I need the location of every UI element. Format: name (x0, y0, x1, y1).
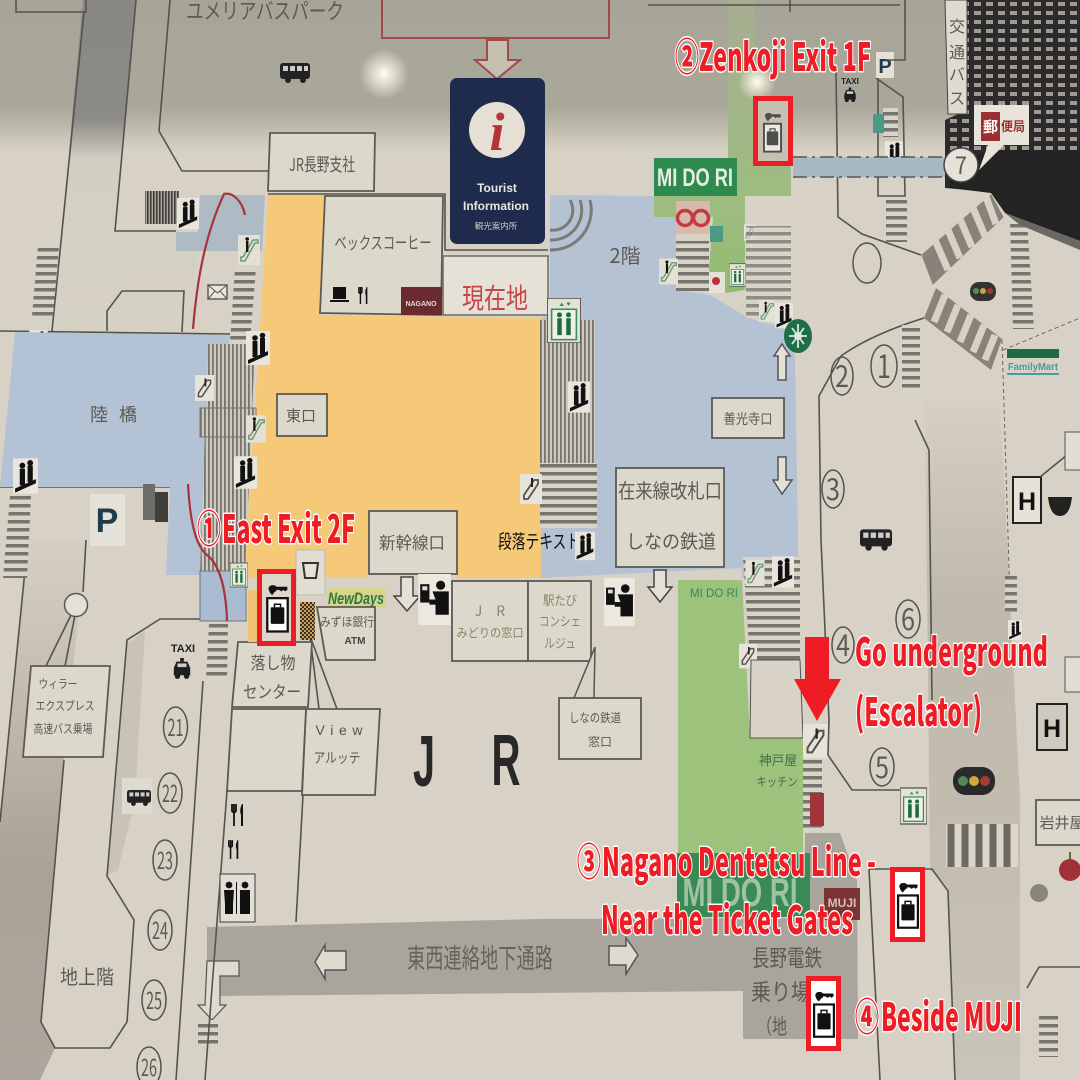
crosswalk stripes two (934, 295, 995, 360)
H sign lower: H (1043, 715, 1061, 743)
sign: local transit bus (945, 0, 967, 114)
arrow to tourist information (475, 40, 520, 79)
icon: escalator (759, 300, 775, 322)
label: East Exit 2F (197, 499, 355, 555)
bus stop 24 (148, 910, 172, 950)
escalator block (676, 241, 709, 291)
Mizuho Bank ATM box (317, 607, 375, 660)
blue walkway (793, 157, 945, 177)
icon: escalator (238, 235, 260, 265)
label: Nagano Dentetsu Line (577, 832, 876, 888)
JR Nagano branch box: JR長野支社 (289, 151, 355, 177)
icon: escalator (739, 644, 757, 668)
number 6 (896, 597, 920, 639)
conventional line gates box: 在来線改札口 (618, 475, 722, 504)
icon: bus (122, 778, 152, 814)
number 1 (871, 342, 897, 388)
number 6: 6 (901, 597, 915, 639)
label: Zenkoji Exit 1F: ② (675, 27, 699, 83)
panel: tourist information sign (450, 78, 545, 244)
icon: cutlery (229, 840, 238, 859)
bump with P sign (876, 78, 905, 196)
route curve lower (188, 484, 227, 621)
panel: tourist information sign: 観光案内所 (475, 220, 518, 232)
you are here box (443, 256, 548, 317)
number 1: 1 (877, 342, 891, 388)
icon: stairs person (885, 141, 903, 167)
bus stop 26 (137, 1047, 161, 1080)
Willer Express box: 高速バス乗場 (34, 720, 92, 737)
stairs small (902, 325, 920, 392)
label: Nagano Dentetsu boarding: 長野電鉄 (752, 939, 822, 973)
conventional line gates box (616, 468, 724, 567)
shop outlines (217, 791, 303, 922)
panel: green MIDORI lower (678, 580, 806, 917)
icon: bus (280, 63, 310, 83)
Mizuho Bank ATM box: ATM (345, 636, 365, 647)
arrow right (609, 938, 638, 974)
logo: Starbucks (784, 319, 812, 353)
logo: NAGANO (405, 301, 437, 308)
icon: traffic light (970, 282, 996, 301)
label: Nagano Dentetsu Line: ③ (577, 832, 601, 888)
arrow down (394, 577, 420, 611)
number 7: 7 (955, 146, 967, 181)
icon: traffic light lower (953, 767, 995, 795)
MIDORI lower sign (677, 853, 810, 917)
MUJI sign: MUJI (828, 896, 856, 910)
corner box top-left (16, 0, 86, 12)
H sign lower (1037, 704, 1067, 750)
bus stop 21: 21 (168, 709, 184, 743)
marker 1: red locker frame East Exit (260, 572, 294, 644)
label: ground floor: 地上階 (60, 961, 114, 990)
blue area upper landing (176, 195, 265, 251)
number 2: 2 (835, 354, 849, 396)
icon: elevator (547, 298, 581, 343)
icon: staff (604, 578, 635, 626)
upper strip between info and shop (268, 194, 548, 250)
road lines lower-left (176, 681, 217, 1080)
icon: stairs person (13, 458, 38, 494)
panel: east exit concourse orange (244, 195, 543, 578)
stairs landing band (200, 408, 256, 437)
Beck's Coffee box (320, 196, 443, 315)
Willer Express box: ウィラー (38, 675, 78, 692)
route curve upper (193, 194, 245, 329)
JR ticket office box: みどりの窓口 (456, 624, 524, 641)
icon: apple badge (709, 272, 725, 293)
Shinkansen box (369, 511, 457, 574)
arrow L-shape to stairs (198, 961, 239, 1020)
left lower shade (0, 540, 86, 1080)
panel: underground passage grey (207, 833, 858, 1039)
floor label 2F: 2階 (609, 240, 641, 269)
stairs upper right (883, 107, 898, 137)
label: Escalator: (Escalator) (855, 682, 982, 738)
circle with pointer: bus stop (46, 594, 88, 666)
stairs center lower (540, 463, 597, 528)
top shaded area (0, 0, 1080, 150)
conventional line gates box: しなの鉄道 (626, 527, 716, 554)
label: Beside MUJI (855, 987, 1022, 1043)
arrow up (774, 344, 790, 380)
marker 3: red locker frame Nagano Dentetsu (892, 870, 922, 940)
label: East Exit 2F: East Exit 2F (222, 499, 355, 555)
sign: MIDORI top: MI DO RI (657, 164, 733, 192)
travel concierge box: コンシェ (539, 611, 581, 630)
JR ticket office box: J R (475, 601, 505, 621)
icon: post box (810, 793, 824, 826)
stairs small upper (886, 200, 907, 242)
label: bridge: 陸 (90, 401, 108, 427)
sign: MIDORI top (654, 158, 737, 196)
arrow down (773, 457, 792, 494)
sign: post office: 郵 (983, 116, 998, 137)
street outlines right (819, 69, 1080, 1080)
bus stop 21 (164, 707, 188, 747)
ATM icon box (296, 550, 325, 595)
sign: local transit bus: 交 (949, 13, 965, 37)
stairs center (540, 320, 595, 463)
stairs to upper (230, 268, 256, 342)
paragraph placeholder text: 段落テキスト (498, 527, 580, 554)
icon: mail (208, 285, 227, 299)
stairs right block (743, 557, 800, 660)
icon: escalator (744, 224, 756, 241)
icon: stairs person (775, 303, 793, 328)
label: Nagano Dentetsu Line: Nagano Dentetsu Line - (602, 832, 876, 888)
label: underground passage: 東西連絡地下通路 (407, 937, 553, 976)
icon: escalator (246, 415, 266, 443)
bus stop 22: 22 (162, 775, 178, 809)
marker 2: red locker frame Zenkoji Exit (756, 98, 790, 164)
icon: hot spring (1030, 884, 1048, 902)
icon: escalator (520, 474, 542, 504)
icon: elevator (230, 563, 248, 587)
label: Iwaiya (1036, 800, 1080, 845)
travel concierge box: 駅たび (543, 590, 577, 609)
arrow down (648, 570, 672, 602)
sign: local transit bus: 通 (949, 39, 965, 63)
lost and found box: センター (243, 678, 301, 703)
East exit label box (277, 394, 327, 436)
label: Kobeya Kitchen (756, 750, 798, 790)
sign: post office: 便局 (1001, 116, 1025, 135)
panel: zenkoji concourse blue (541, 195, 798, 578)
label: Near the Ticket Gates: Near the Ticket Gates (601, 890, 853, 946)
JR big letters: R (492, 721, 520, 801)
light green upper (654, 0, 791, 293)
H sign with ramen (1013, 432, 1080, 523)
glare top (738, 63, 776, 101)
bus stop 25 (142, 980, 166, 1020)
Shinano Railway window callout: 窓口 (588, 733, 612, 750)
number 7 (944, 146, 978, 182)
icon: elevator (729, 264, 746, 286)
sign: post office (974, 105, 1029, 170)
crosswalk stripes one (935, 197, 996, 270)
arrow: go underground (794, 637, 841, 721)
P sign: P (96, 502, 118, 540)
label box long (1065, 657, 1080, 692)
icon: elevator (900, 788, 927, 824)
view alte callout: アルッテ (314, 748, 360, 768)
stairs left (32, 246, 59, 316)
marker 4: red locker frame MUJI (808, 978, 838, 1048)
MIDORI lower sign: MI DO RI (682, 871, 798, 915)
circle marker (853, 243, 881, 283)
Mizuho Bank ATM box: みずほ銀行 (320, 613, 374, 630)
number 3: 3 (826, 467, 840, 509)
Shinano Railway window callout (559, 647, 641, 759)
green sign (710, 226, 723, 242)
P sign (90, 494, 125, 546)
stairs lower-left (3, 496, 31, 578)
road band near terminal (52, 0, 198, 332)
label: Zenkoji Exit 1F: Zenkoji Exit 1F (699, 27, 871, 83)
blue lower west (200, 571, 246, 621)
icon: escalator (745, 560, 765, 586)
icon: stairs person (29, 330, 48, 356)
label: Nagano Dentetsu boarding: 乗り場 (751, 973, 811, 1007)
crosswalk vertical (1010, 220, 1034, 329)
crosswalk diagonal two (924, 288, 1002, 370)
travel concierge box (528, 581, 591, 661)
logo: FamilyMart: FamilyMart (1008, 361, 1058, 373)
label: bridge 2: 橋 (119, 401, 137, 427)
icon: cutlery (232, 804, 243, 826)
red outline top box (382, 0, 609, 38)
view alte callout (302, 636, 380, 795)
view alte callout: View (316, 722, 363, 738)
stairs by kitchen (803, 760, 822, 832)
icon: escalator (803, 724, 828, 758)
taxi (171, 643, 195, 679)
panel: tourist information sign: i (489, 102, 505, 162)
label: East Exit 2F: ① (197, 499, 221, 555)
number 4: 4 (836, 623, 850, 665)
green sign small (873, 114, 884, 133)
icon: stairs person (568, 381, 590, 413)
bus stop 25: 25 (146, 982, 162, 1016)
sign: local transit bus: ス (949, 85, 965, 109)
JR ticket office box (452, 581, 528, 661)
Willer Express box: エクスプレス (36, 697, 94, 714)
Zenkoji exit label: 善光寺口 (724, 409, 772, 429)
icon: escalator (659, 259, 678, 284)
panel: building photo (945, 0, 1080, 250)
panel: left concourse (0, 332, 230, 575)
Zenkoji exit label (712, 398, 784, 438)
taxi lane shade (107, 630, 145, 876)
Shinano Railway window callout: しなの鉄道 (569, 709, 621, 726)
panel: tourist information sign: Information (463, 199, 529, 213)
icon: stairs person (1008, 620, 1022, 640)
label: Zenkoji Exit 1F (675, 27, 871, 83)
JR big letters: J (413, 722, 435, 802)
icon: apple (1059, 852, 1080, 881)
curved stairs (550, 200, 591, 250)
right streets: grey road (925, 400, 1020, 1080)
label: Kobeya Kitchen: 神戸屋 (759, 750, 797, 769)
icon: coffee (330, 287, 349, 302)
crosswalk diagonal one (922, 195, 1003, 284)
bus stop 22 (158, 773, 182, 813)
P sign right (876, 52, 894, 78)
dark pillar (143, 484, 168, 522)
Willer Express box (23, 666, 110, 757)
number 5 (870, 745, 894, 787)
bus stop 23: 23 (157, 842, 173, 876)
sign: local transit bus: バ (949, 61, 965, 85)
stairs right mid (1005, 576, 1017, 612)
empty shop box (227, 709, 306, 791)
icon: stairs person (246, 331, 270, 365)
NewDays logo: NewDays (328, 589, 384, 608)
dashed lines right (1002, 318, 1080, 600)
stairs block right (746, 226, 791, 318)
logo: FamilyMart (1007, 349, 1059, 375)
crosswalk lower (946, 824, 1018, 867)
stairs lower west (206, 624, 228, 680)
number 5: 5 (875, 745, 889, 787)
travel concierge box: ルジュ (544, 633, 576, 652)
lost and found box: 落し物 (250, 649, 296, 674)
bus stop 24: 24 (152, 912, 168, 946)
icon: cutlery (359, 287, 367, 304)
JR Nagano branch box (268, 133, 375, 191)
stairs upper left (145, 191, 179, 224)
MUJI sign (824, 888, 860, 920)
label: Kobeya Kitchen: キッチン (756, 773, 798, 790)
outlines upper left (0, 0, 268, 1048)
stairs main east (200, 344, 255, 575)
icon: bus (860, 529, 892, 551)
icon: escalator (195, 375, 214, 401)
stairs lower (198, 1020, 218, 1046)
icon: toilets (220, 874, 255, 922)
P sign right: P (878, 56, 892, 78)
orange piece (248, 590, 296, 642)
glare (359, 49, 409, 99)
icon: stairs person (234, 456, 257, 489)
Shinkansen box: 新幹線口 (379, 529, 445, 554)
you are here box: 現在地 (462, 277, 528, 317)
icon: staff (418, 574, 451, 625)
nook (750, 660, 803, 738)
icon: stairs person (575, 532, 595, 560)
label: MIDORI green: MI DO RI (690, 586, 738, 600)
taxi top (841, 77, 859, 102)
H sign with ramen: H (1018, 488, 1036, 516)
checker pattern (300, 602, 315, 640)
East exit label box: 東 口 (286, 405, 316, 426)
arrow left (315, 945, 346, 979)
icon: stairs person (177, 198, 199, 229)
taxi top: TAXI (841, 77, 859, 86)
stairs lower right (1039, 1015, 1058, 1057)
panel: tourist information sign: Tourist (477, 181, 517, 195)
logo: midori infinity (676, 201, 710, 234)
label: Nagano Dentetsu boarding: （地 (757, 1011, 787, 1041)
lost and found box (232, 642, 312, 707)
bus stop 23 (153, 840, 177, 880)
JR big letters (413, 721, 520, 802)
icon: stairs person (772, 556, 794, 588)
lines top right (648, 0, 905, 60)
Beck's Coffee box: ベックスコーヒー (334, 229, 432, 254)
label: Nagano Dentetsu boarding (751, 939, 822, 1041)
label: Beside MUJI: ④ (855, 987, 879, 1043)
taxi: TAXI (171, 643, 195, 655)
